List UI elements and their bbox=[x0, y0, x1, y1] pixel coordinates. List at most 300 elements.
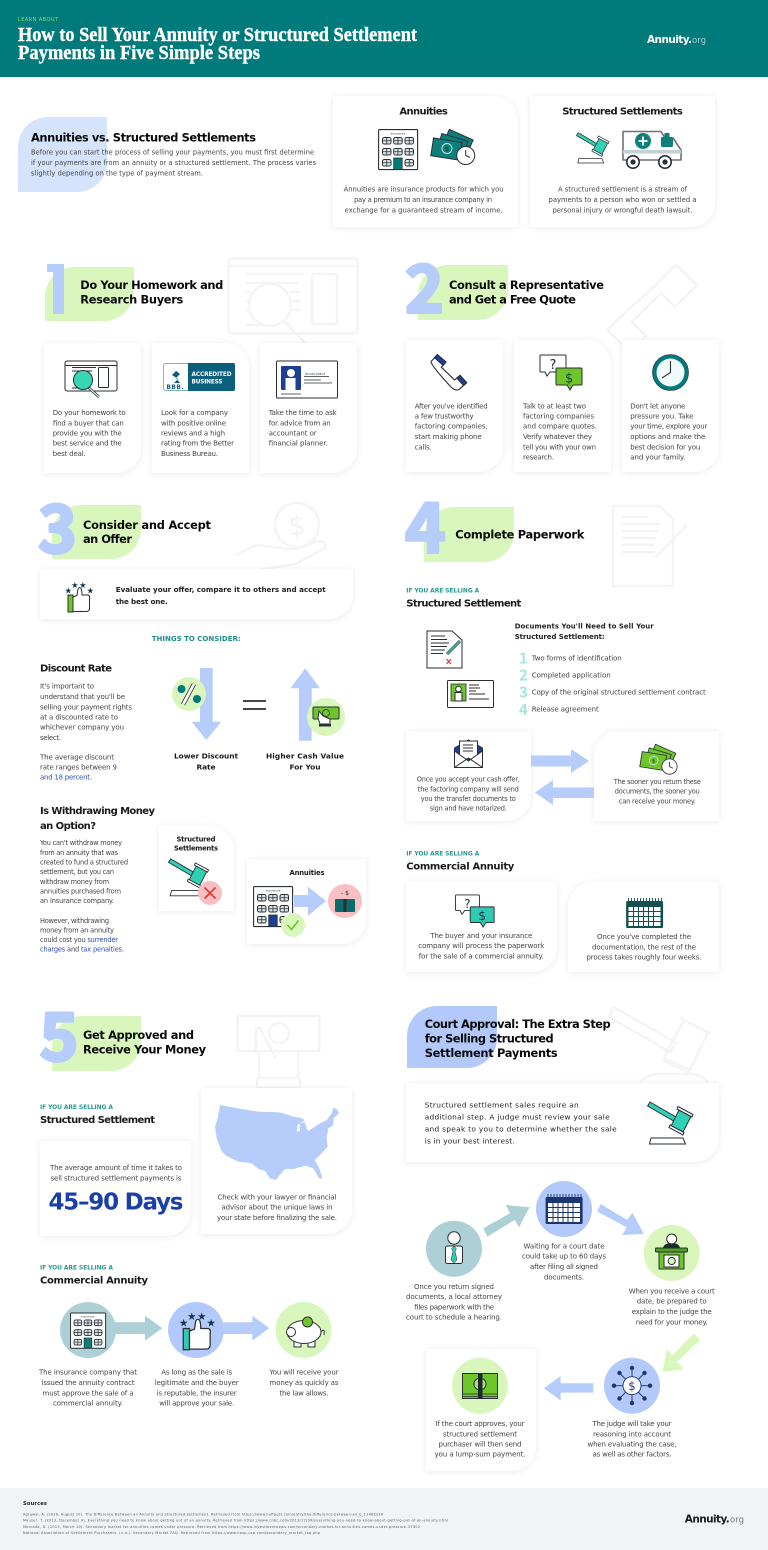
card text: documents, the sooner you bbox=[615, 788, 700, 796]
documents heading: Structured Settlement: bbox=[515, 633, 605, 641]
ghost icon: coin over hand: $ bbox=[288, 509, 306, 542]
label: if selling structured settlement: IF YOU ARE SELLING A bbox=[406, 588, 480, 595]
icon: telephone bbox=[431, 355, 467, 390]
eyebrow: learn about: LEARN ABOUT bbox=[18, 17, 59, 23]
step 2 title bbox=[449, 278, 604, 306]
label: higher cash value bbox=[266, 751, 344, 772]
footer logo: Annuity. bbox=[685, 1514, 730, 1526]
card text bbox=[586, 933, 702, 962]
text: need for your money. bbox=[636, 1318, 708, 1326]
discount rate text: whichever company you bbox=[40, 724, 124, 732]
card text: and your family. bbox=[630, 454, 685, 462]
step 5 heading bbox=[40, 984, 207, 1080]
step: waiting for court date bbox=[522, 1181, 606, 1281]
label: if selling structured settlement: Structured Settlement bbox=[406, 598, 522, 610]
text: must approve the sale of a bbox=[42, 1389, 134, 1397]
step: explain to judge bbox=[629, 1225, 715, 1326]
intro text: if your payments are from an annuity or a structured settlement. The process varies bbox=[31, 159, 317, 167]
discount rate heading: Discount Rate bbox=[40, 664, 112, 674]
text: As long as the sale is bbox=[161, 1369, 233, 1377]
text: purchaser will then send bbox=[438, 1440, 522, 1448]
text: You will receive your bbox=[268, 1369, 339, 1377]
equals sign bbox=[243, 701, 266, 709]
panel: evaluate offer bbox=[40, 569, 353, 619]
panel: step 1 card 2 bbox=[152, 343, 249, 473]
panel: 45-90 days bbox=[40, 1141, 191, 1236]
card text: pressure you. Take bbox=[630, 412, 693, 420]
step 5 title bbox=[83, 1028, 207, 1056]
text: files paperwork with the bbox=[414, 1303, 494, 1311]
icon: BBB accredited business: ACCREDITED bbox=[192, 372, 232, 378]
card text: After you've identified bbox=[415, 402, 488, 410]
text: commercial annuity. bbox=[53, 1400, 123, 1408]
annuities text: exchange for a guaranteed stream of income. bbox=[345, 206, 503, 214]
documents list: 3 bbox=[519, 682, 528, 703]
step 2 title: and Get a Free Quote bbox=[449, 292, 576, 306]
icon: red x bbox=[198, 881, 222, 905]
withdrawing text: could cost you surrender bbox=[40, 936, 118, 944]
card text bbox=[268, 409, 338, 448]
panel: return documents bbox=[594, 731, 719, 821]
panel: transfer documents bbox=[406, 731, 531, 821]
card text: best deal. bbox=[53, 450, 86, 458]
arrow bbox=[115, 1316, 162, 1341]
text: The judge will take your bbox=[592, 1420, 672, 1428]
documents list: 1 bbox=[519, 648, 528, 669]
sources heading: Sources bbox=[23, 1501, 47, 1507]
discount rate text: rate ranges between 9 bbox=[40, 764, 117, 772]
card title: Structured bbox=[176, 836, 216, 844]
structured settlements text: payments to a person who won or settled a bbox=[548, 196, 696, 204]
label: if selling commercial annuity: Commercial Annuity bbox=[40, 1276, 148, 1286]
card text: options and make the bbox=[630, 433, 705, 441]
documents list: Two forms of identification bbox=[531, 654, 622, 662]
step 5 title: Receive Your Money bbox=[83, 1042, 207, 1056]
panel: four weeks bbox=[568, 882, 719, 972]
panel: step 2 card 1 bbox=[406, 340, 503, 472]
ghost icon: document bbox=[613, 506, 687, 586]
icon: ambulance bbox=[623, 132, 681, 168]
text bbox=[434, 1420, 526, 1459]
card text: research. bbox=[523, 454, 554, 462]
text: issued the annuity contract bbox=[42, 1379, 135, 1387]
card text: Take the time to ask bbox=[268, 409, 338, 417]
stat: 45-90 days: 45–90 Days bbox=[48, 1190, 184, 1216]
label: if selling commercial annuity: Commercial Annuity bbox=[406, 862, 515, 872]
step 1 title: Do Your Homework and bbox=[80, 278, 223, 292]
annuities text: pay a premium to an insurance company in bbox=[354, 196, 492, 204]
panel: step 1 card 3 bbox=[260, 343, 357, 473]
label: if selling commercial annuity bbox=[40, 1265, 148, 1286]
card text: financial planner. bbox=[269, 440, 328, 448]
text bbox=[629, 1288, 715, 1326]
step: insurer approves sale bbox=[155, 1302, 239, 1408]
evaluate text: the best one. bbox=[116, 597, 168, 606]
withdrawing heading bbox=[40, 806, 155, 832]
icon: BBB accredited business: BBB. bbox=[166, 385, 184, 391]
label: if selling structured settlement bbox=[40, 1104, 155, 1126]
card text: for the sale of a commercial annuity. bbox=[419, 952, 544, 960]
withdrawing text: created to fund a structured bbox=[40, 858, 128, 866]
arrow bbox=[294, 887, 326, 916]
documents list bbox=[519, 648, 706, 720]
discount rate text: selling your payment rights bbox=[40, 703, 132, 711]
panel: judge review bbox=[406, 1083, 719, 1162]
card text: The buyer and your insurance bbox=[429, 932, 532, 940]
card text: provide you with the bbox=[53, 429, 122, 437]
card text: start making phone bbox=[415, 433, 482, 441]
chart: higher cash value arrow bbox=[266, 668, 345, 772]
panel: process paperwork bbox=[406, 882, 557, 972]
intro: annuities vs structured settlements bbox=[18, 117, 317, 192]
text bbox=[406, 1283, 502, 1322]
withdrawing text: settlement, but you can bbox=[40, 868, 114, 876]
footer logo: org bbox=[730, 1516, 744, 1526]
icon: BBB accredited business bbox=[163, 363, 235, 391]
numeral 5: 5 bbox=[40, 984, 78, 1080]
withdrawing text: an insurance company. bbox=[40, 897, 114, 905]
arrow bbox=[544, 1376, 593, 1401]
step 3 heading bbox=[38, 476, 212, 572]
sources list: Mauser, T. (2013, December 9). Everything you need to know about getting out of an annuity. Retrieved from https://www.cnbc.com/2013/12/09/everything-you-need-to-know-about-getting-out-of-an-annuity.html bbox=[23, 1518, 448, 1522]
card text: and speak to you to determine whether the sale bbox=[425, 1124, 617, 1133]
card text: and compare quotes. bbox=[523, 423, 597, 431]
panel: annuities withdrawal bbox=[247, 859, 366, 944]
annuities text bbox=[344, 186, 504, 214]
step 1 title bbox=[80, 278, 223, 306]
arrow bbox=[223, 1316, 269, 1341]
icon: identification card bbox=[448, 680, 494, 708]
card text: company will process the paperwork bbox=[418, 942, 545, 950]
structured settlements text bbox=[548, 186, 696, 214]
numeral 1: 1 bbox=[42, 242, 77, 329]
icon: attorney bbox=[446, 1232, 462, 1264]
evaluate text: Evaluate your offer, compare it to others and accept bbox=[116, 585, 326, 594]
step 2 title: Consult a Representative bbox=[449, 278, 604, 292]
card text: Look for a company bbox=[161, 409, 228, 417]
withdrawing text: money from an annuity bbox=[40, 926, 114, 934]
step: attorney files paperwork bbox=[406, 1221, 502, 1322]
panel: structured settlements: Structured Settlements bbox=[562, 107, 683, 118]
card text bbox=[161, 409, 234, 458]
text bbox=[38, 1369, 137, 1408]
panel: state laws bbox=[201, 1088, 352, 1234]
card text: rating from the Better bbox=[161, 440, 234, 448]
label: if selling commercial annuity bbox=[406, 850, 515, 872]
map of the United States bbox=[215, 1105, 339, 1180]
card text: process takes roughly four weeks. bbox=[586, 954, 702, 962]
icon: banded cash bbox=[462, 1374, 498, 1398]
logo: Annuity. bbox=[647, 34, 692, 46]
card text bbox=[49, 1164, 182, 1182]
card text bbox=[417, 776, 520, 813]
numeral 4: 4 bbox=[405, 472, 446, 572]
card text: The sooner you return these bbox=[613, 778, 701, 786]
icon: signed document bbox=[427, 631, 462, 668]
evaluate text bbox=[116, 585, 326, 606]
text: you a lump-sum payment. bbox=[434, 1451, 526, 1459]
ghost icon: gavel bbox=[609, 1007, 711, 1083]
label: lower discount rate bbox=[174, 751, 238, 772]
icon: building bbox=[254, 887, 293, 927]
annuities text: Annuities are insurance products for which you bbox=[344, 186, 504, 194]
heading title: Settlement Payments bbox=[425, 1046, 558, 1060]
icon: gavel bbox=[648, 1102, 693, 1144]
discount rate text bbox=[39, 683, 132, 782]
structured settlements text: A structured settlement is a stream of bbox=[558, 186, 688, 194]
card text: Verify whatever they bbox=[523, 433, 592, 441]
icon: network with dollar: $ bbox=[628, 1379, 636, 1393]
structured settlements text: personal injury or wrongful death lawsuit. bbox=[552, 206, 692, 214]
numeral 3: 3 bbox=[38, 476, 77, 572]
step 4 title: Complete Paperwork bbox=[455, 528, 585, 542]
label: higher cash value: For You bbox=[290, 763, 320, 772]
icon: money out: - $ bbox=[341, 890, 349, 897]
card text: you the transfer documents to bbox=[421, 795, 516, 803]
arrow bbox=[483, 1205, 530, 1237]
heading title: for Selling Structured bbox=[425, 1032, 554, 1046]
card text: Talk to at least two bbox=[522, 402, 586, 410]
icon: question and dollar chat bbox=[540, 355, 582, 390]
label: if selling commercial annuity: IF YOU ARE SELLING A bbox=[40, 1265, 113, 1272]
documents list: Completed application bbox=[532, 671, 611, 679]
card text: with positive online bbox=[161, 419, 226, 427]
text bbox=[155, 1369, 239, 1408]
discount rate text: and 18 percent. bbox=[40, 774, 92, 782]
ghost icon: search window bbox=[228, 258, 358, 344]
card text: accountant or bbox=[269, 429, 317, 437]
title: Payments in Five Simple Steps bbox=[18, 42, 260, 64]
documents list: 4 bbox=[519, 699, 528, 720]
heading title: Court Approval: The Extra Step bbox=[425, 1017, 611, 1031]
text: when evaluating the case, bbox=[588, 1440, 676, 1448]
discount rate text: select. bbox=[40, 734, 61, 742]
text: is reputable, the insurer bbox=[157, 1389, 237, 1397]
withdrawing heading: an Option? bbox=[40, 821, 96, 832]
panel: lump-sum payment bbox=[426, 1349, 536, 1471]
card text: factoring companies bbox=[523, 412, 594, 420]
card text: sign and have notarized. bbox=[430, 805, 507, 813]
text: the law allows. bbox=[280, 1389, 328, 1397]
card text: calls. bbox=[415, 443, 432, 451]
footer bbox=[0, 1488, 768, 1550]
sources list bbox=[23, 1512, 448, 1535]
label: higher cash value: Higher Cash Value bbox=[266, 751, 344, 760]
card text: your time, explore your bbox=[630, 423, 707, 431]
title bbox=[18, 24, 417, 64]
card title: Settlements bbox=[174, 844, 218, 852]
card text: additional step. A judge must review your sale bbox=[425, 1112, 610, 1121]
text: court to schedule a hearing. bbox=[406, 1314, 502, 1322]
step 1 title: Research Buyers bbox=[80, 292, 184, 306]
icon: gavel bbox=[169, 859, 208, 896]
card text bbox=[418, 932, 545, 960]
card text: Check with your lawyer or financial bbox=[218, 1194, 337, 1202]
text: documents. bbox=[544, 1273, 584, 1281]
panel: structured settlements withdrawal bbox=[159, 826, 234, 911]
card text bbox=[415, 402, 488, 451]
icon: insurance building bbox=[379, 130, 418, 170]
text: after filing all signed bbox=[530, 1263, 598, 1271]
card text: a few trustworthy bbox=[415, 412, 474, 420]
ghost icon: hand holding banknote bbox=[238, 1016, 320, 1088]
numeral 1 bbox=[47, 264, 64, 314]
logo: org bbox=[692, 36, 706, 46]
card text: best decision for you bbox=[630, 443, 700, 451]
card text: for advice from an bbox=[269, 419, 331, 427]
icon: judge at bench bbox=[656, 1234, 688, 1269]
icon: money and clock bbox=[431, 129, 475, 164]
things to consider label: THINGS TO CONSIDER: bbox=[152, 635, 241, 643]
step 2 heading bbox=[405, 236, 604, 332]
card text bbox=[425, 1100, 617, 1145]
icon: gavel bbox=[576, 133, 609, 163]
card text bbox=[522, 402, 597, 462]
step: insurance company approves bbox=[38, 1302, 137, 1408]
text: explain to the judge the bbox=[632, 1308, 712, 1316]
card text: the factoring company will send bbox=[418, 785, 519, 793]
label: if selling commercial annuity: IF YOU ARE SELLING A bbox=[406, 850, 480, 857]
icon: thumbs up with stars bbox=[64, 581, 94, 612]
panel: annuities: Annuities bbox=[399, 107, 448, 118]
intro text: slightly depending on the type of payment stream. bbox=[31, 169, 203, 177]
arrow bbox=[597, 1204, 644, 1235]
title: How to Sell Your Annuity or Structured Settlement bbox=[18, 24, 417, 46]
label: lower discount rate: Rate bbox=[196, 763, 216, 772]
icon: check bbox=[281, 913, 305, 937]
label: if selling structured settlement: IF YOU ARE SELLING A bbox=[40, 1104, 113, 1111]
court approval heading bbox=[407, 1006, 611, 1068]
card text: The average amount of time it takes to bbox=[49, 1164, 182, 1172]
documents list: 2 bbox=[519, 665, 528, 686]
withdrawing text: withdraw money from bbox=[40, 878, 109, 886]
card text: can receive your money. bbox=[619, 797, 696, 805]
text: as well as other factors. bbox=[592, 1451, 672, 1459]
arrow: left bbox=[535, 780, 594, 805]
ghost icon: coin over hand bbox=[236, 503, 325, 570]
step 3 title: an Offer bbox=[83, 532, 132, 546]
withdrawing text: You can't withdraw money bbox=[39, 839, 122, 847]
card text: sell structured settlement payments is bbox=[50, 1174, 182, 1182]
intro text bbox=[31, 149, 317, 177]
card text: is in your best interest. bbox=[425, 1136, 515, 1145]
step: receive money bbox=[268, 1302, 339, 1397]
card text: Do your homework to bbox=[53, 409, 126, 417]
text: documents, a local attorney bbox=[406, 1293, 502, 1301]
card text: factoring companies, bbox=[415, 423, 488, 431]
panel: structured settlements bbox=[530, 96, 715, 227]
card text: find a buyer that can bbox=[53, 419, 124, 427]
text: If the court approves, your bbox=[436, 1420, 525, 1428]
label: if selling structured settlement bbox=[406, 588, 522, 610]
header banner bbox=[0, 0, 768, 77]
card text bbox=[630, 402, 707, 462]
card text: Structured settlement sales require an bbox=[425, 1100, 579, 1109]
intro text: Before you can start the process of selling your payments, you must first determine bbox=[31, 149, 314, 157]
card title bbox=[174, 836, 218, 852]
ghost icon: telephone bbox=[607, 265, 697, 352]
icon: piggy bank bbox=[286, 1317, 324, 1347]
card text: best service and the bbox=[53, 440, 122, 448]
discount rate text: at a discounted rate to bbox=[40, 714, 118, 722]
text bbox=[522, 1243, 606, 1281]
documents heading bbox=[515, 623, 654, 641]
card text: documentation, the rest of the bbox=[592, 943, 696, 951]
panel: step 2 card 3 bbox=[622, 340, 719, 472]
panel: step 2 card 2 bbox=[514, 340, 611, 472]
withdrawing text: charges and tax penalties. bbox=[40, 946, 124, 954]
card text: Once you've completed the bbox=[597, 933, 691, 941]
withdrawing heading: Is Withdrawing Money bbox=[40, 806, 155, 817]
text: date, be prepared to bbox=[637, 1298, 707, 1306]
icon: calendar bbox=[626, 898, 663, 928]
card text: Once you accept your cash offer, bbox=[417, 776, 520, 784]
card text: Business Bureau. bbox=[161, 450, 218, 458]
text: When you receive a court bbox=[629, 1288, 715, 1296]
label: if selling structured settlement: Structured Settlement bbox=[40, 1115, 155, 1126]
panel: annuities bbox=[333, 96, 518, 227]
discount rate text: understand that you'll be bbox=[40, 693, 125, 701]
card text bbox=[217, 1194, 337, 1222]
step: judge evaluates bbox=[588, 1358, 676, 1459]
withdrawing text bbox=[39, 839, 128, 954]
card text: reviews and a high bbox=[161, 429, 225, 437]
panel: step 1 card 1 bbox=[44, 343, 141, 473]
icon: chat bbox=[456, 895, 494, 927]
step 3 title bbox=[83, 518, 212, 546]
withdrawing text: annuities purchased from bbox=[40, 888, 121, 896]
card text bbox=[53, 409, 126, 458]
arrow: right bbox=[531, 749, 589, 773]
icon: envelope bbox=[454, 740, 482, 768]
sources list: Mercado, D. (2013, March 10). Secondary market for annuities comes under pressure. Retrieved from https://www.investmentnews.com/secondary-market-for-annuities-comes-under-pressure-37302 bbox=[23, 1525, 420, 1529]
text bbox=[588, 1420, 676, 1459]
text: money as quickly as bbox=[270, 1379, 339, 1387]
card text: your state before finalizing the sale. bbox=[217, 1214, 337, 1222]
step 1 heading bbox=[45, 264, 222, 321]
text: structured settlement bbox=[443, 1430, 517, 1438]
numeral 2: 2 bbox=[405, 236, 444, 332]
intro heading: Annuities vs. Structured Settlements bbox=[31, 130, 256, 144]
withdrawing text: from an annuity that was bbox=[40, 849, 119, 857]
discount rate text: It's important to bbox=[40, 683, 94, 691]
text: The insurance company that bbox=[38, 1369, 137, 1377]
text: reasoning into account bbox=[593, 1430, 671, 1438]
text: will approve your sale. bbox=[159, 1400, 234, 1408]
text bbox=[268, 1369, 339, 1397]
sources list: Agrawal, A. (2016, August 10). The Difference Between an Annuity and Structured Settlement. Retrieved from https://www.huffpost.com/entry/the-difference-between-an_b_11462220 bbox=[23, 1512, 383, 1516]
chart: lower discount rate arrow bbox=[172, 668, 238, 772]
documents heading: Documents You'll Need to Sell Your bbox=[515, 623, 654, 631]
text: could take up to 60 days bbox=[522, 1253, 606, 1261]
icon: accountant card: Accountant bbox=[305, 372, 326, 376]
sources list: National Association of Settlement Purchasers. (n.d.). Secondary Market FAQ. Retrieved from https://www.nasp-usa.com/secondary_market_faq.php bbox=[23, 1531, 320, 1535]
card text: tell you with your own bbox=[523, 443, 596, 451]
text: Once you return signed bbox=[414, 1283, 494, 1291]
text: legitimate and the buyer bbox=[155, 1379, 239, 1387]
heading title bbox=[425, 1017, 611, 1060]
card text: advisor about the unique laws in bbox=[222, 1204, 332, 1212]
withdrawing text: However, withdrawing bbox=[40, 917, 109, 925]
icon: money and clock bbox=[640, 744, 677, 774]
card text bbox=[613, 778, 701, 805]
icon: magnifying glass on window bbox=[65, 361, 117, 397]
panel: annuities withdrawal: Annuities bbox=[290, 869, 324, 877]
step 3 title: Consider and Accept bbox=[83, 518, 212, 532]
text: Waiting for a court date bbox=[524, 1243, 604, 1251]
documents list: Copy of the original structured settlement contract bbox=[532, 688, 706, 696]
discount rate text: The average discount bbox=[39, 753, 114, 761]
